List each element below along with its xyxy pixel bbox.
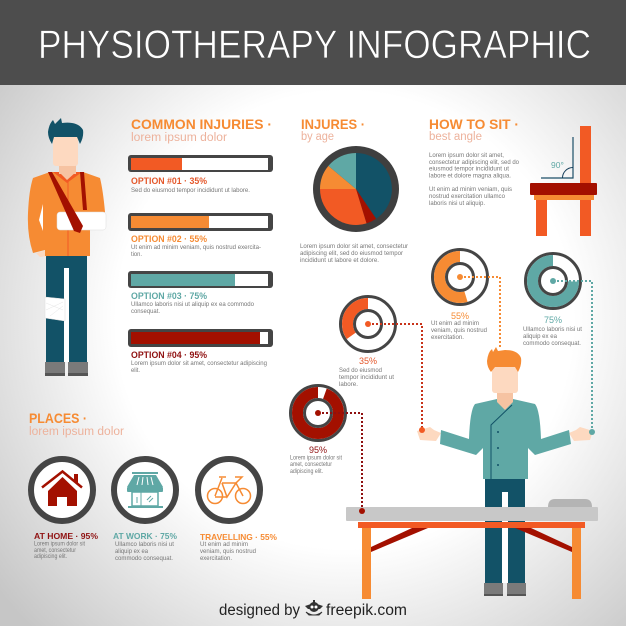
how to sit text: labore et dolore magna aliqua. (429, 174, 511, 180)
donut: 95%: Lorem ipsum dolor sit (290, 456, 342, 462)
footer credit: freepik.com (326, 602, 407, 619)
pie chart (313, 146, 399, 232)
donut: 95%: 95% (309, 445, 327, 455)
donut: 35%: 35% (359, 356, 377, 366)
label: at work: commodo consequat. (115, 556, 173, 562)
donut: 55%: veniam, quis nostrud (431, 328, 487, 334)
footer credit: designed by (219, 602, 300, 619)
label: travelling: TRAVELLING · 55% (200, 532, 277, 542)
donut: 55%: 55% (451, 311, 469, 321)
subheading: lorem ipsum dolor (29, 426, 124, 438)
progress bar: option 4: OPTION #04 · 95% (131, 350, 208, 361)
label: travelling (200, 532, 277, 562)
progress bar: option 3: Ullamco laboris nisi ut aliquip ex ea commodo (131, 302, 255, 308)
pie description (300, 244, 408, 264)
donut: 75%: 75% (544, 315, 562, 325)
subheading: best angle (429, 131, 482, 143)
donut: 55%: Ut enim ad minim (431, 321, 479, 327)
subheading: lorem ipsum dolor (131, 132, 227, 144)
label: at work: aliquip ex ea (115, 549, 149, 555)
donut: 95%: adipiscing elit. (290, 469, 323, 475)
heading: how to sit: HOW TO SIT · (429, 116, 519, 132)
progress bar: option 3: OPTION #03 · 75% (131, 291, 208, 302)
progress bar: option 2: OPTION #02 · 55% (131, 234, 208, 245)
label: travelling: Ut enim ad minim (200, 542, 248, 548)
pie description: adipiscing elit, sed do eiusmod tempor (300, 251, 403, 257)
progress bar: option 4: elit. (131, 368, 140, 374)
figure: therapist at table (346, 347, 598, 599)
label: travelling: veniam, quis nostrud (200, 549, 256, 555)
donut: 35%: labore. (339, 382, 358, 388)
footer credit (219, 600, 407, 619)
icon: home (31, 459, 93, 521)
label: at home (34, 531, 98, 560)
how to sit text: Lorem ipsum dolor sit amet, (429, 153, 504, 159)
label: at home: Lorem ipsum dolor sit (34, 542, 85, 548)
donut: 55%: exercitation. (431, 335, 464, 341)
icon: shop (114, 459, 176, 521)
pie description: incididunt ut labore et dolore. (300, 258, 379, 264)
heading: places: PLACES · (29, 410, 87, 426)
pie description: Lorem ipsum dolor sit amet, consectetur (300, 244, 408, 250)
progress bar: option 2: Ut enim ad minim veniam, quis nostrud exercita- (131, 245, 261, 251)
header banner (0, 0, 626, 85)
donut: 55% (431, 250, 500, 347)
progress bar: option 2 (128, 213, 273, 258)
panel: injures by age (300, 116, 408, 264)
progress bar: option 4 (128, 329, 273, 374)
label: at home: amet, consectetur (34, 548, 76, 554)
progress bar: option 1 (128, 155, 273, 194)
progress bar: option 2: tion. (131, 252, 142, 258)
donut: 75%: commodo consequat. (523, 341, 581, 347)
progress bar: option 1: Sed do eiusmod tempor incididunt ut labore. (131, 188, 250, 194)
progress bar: option 4: Lorem ipsum dolor sit amet, consectetur adipiscing (131, 361, 267, 367)
how to sit text: eiusmod tempor incididunt ut (429, 166, 509, 172)
heading: common injuries: COMMON INJURIES · (131, 116, 272, 132)
how to sit text (429, 153, 520, 207)
heading: injures: INJURES · (301, 116, 365, 132)
label: at home: AT HOME · 95% (34, 531, 98, 541)
panel: how to sit (429, 116, 597, 236)
label: travelling: exercitation. (200, 556, 232, 562)
how to sit text: consectetur adipiscing elit, sed do (429, 160, 520, 166)
icon: bicycle (198, 459, 260, 521)
how to sit text: laboris nisi ut aliquip. (429, 201, 485, 207)
progress bar: option 1: OPTION #01 · 35% (131, 176, 208, 187)
label: at work (113, 531, 177, 562)
massage table (346, 499, 598, 599)
figure: patient with sling (28, 118, 106, 376)
label: at work: AT WORK · 75% (113, 531, 177, 541)
donut: 35%: tempor incididunt ut (339, 375, 394, 381)
donut: 95%: amet, consectetur (290, 462, 332, 468)
label: at home: adipiscing elit. (34, 554, 67, 560)
panel: places (29, 410, 277, 562)
label: at work: Ullamco laboris nisi ut (115, 542, 174, 548)
donut: 75%: aliquip ex ea (523, 334, 558, 340)
subheading: by age (301, 131, 334, 143)
donut: 75% (523, 254, 595, 435)
progress bar: option 3: consequat. (131, 309, 160, 315)
chair diagram (530, 126, 597, 236)
donut: 75%: Ullamco laboris nisi ut (523, 327, 582, 333)
chair diagram: 90° (551, 160, 564, 170)
donut: 95% (290, 386, 365, 514)
icon: freepik logo (305, 600, 323, 615)
donut: 35% (339, 296, 425, 433)
progress bar: option 3 (128, 271, 273, 315)
how to sit text: nostrud exercitation ullamco (429, 194, 506, 200)
donut: 35%: Sed do eiusmod (339, 368, 382, 374)
how to sit text: Ut enim ad minim veniam, quis (429, 187, 512, 193)
panel: common injuries (128, 116, 273, 374)
